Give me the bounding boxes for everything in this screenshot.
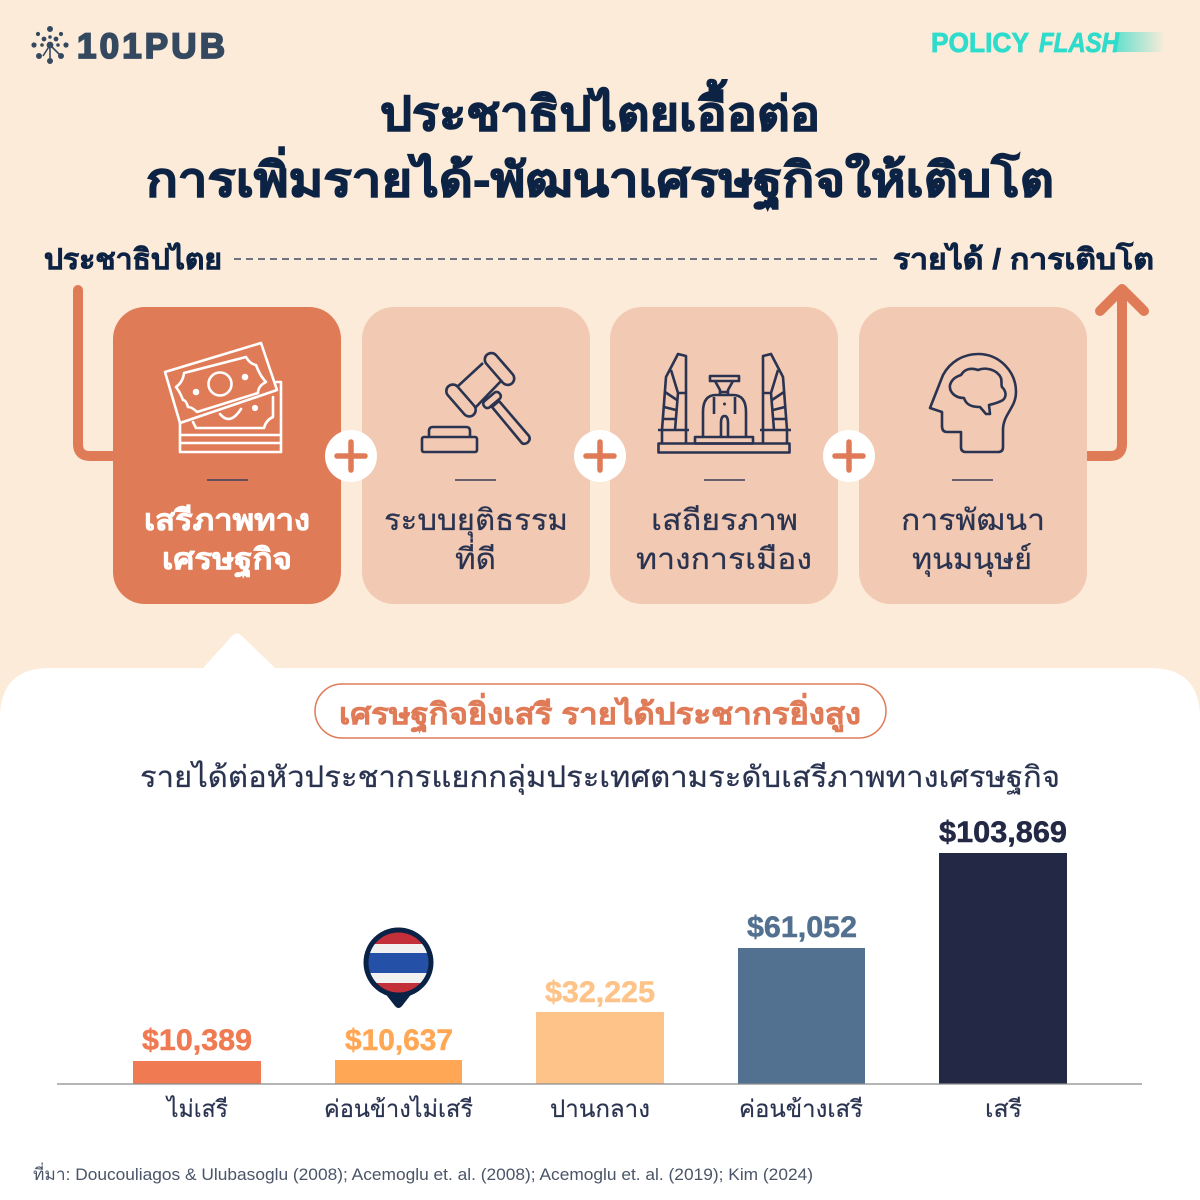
arrow: factors up to income [1087,289,1144,456]
icon: plus 2 [574,430,626,482]
icon: democracy monument [658,354,791,452]
bar: moderate: ปานกลาง [550,1096,650,1123]
label: human capital: ทุนมนุษย์ [912,543,1032,577]
source note: ที่มา: Doucouliagos & Ulubasoglu (2008); Acemoglu et. al. (2008); Acemoglu et. al. (2019); Kim (2024) [33,1162,813,1184]
label: justice system: ที่ดี [455,538,496,576]
label: justice system: ระบบยุติธรรม [384,504,568,538]
bar: not free: $10,389 [142,1024,252,1057]
icon: Thailand flag pin [364,928,434,1008]
panel: white chart section [0,634,1200,1200]
bar: free: $103,869 [939,816,1067,849]
label: economic freedom: เศรษฐกิจ [162,543,292,579]
title: ประชาธิปไตยเอื้อต่อ [380,79,820,140]
icon: banknotes [165,343,281,452]
label: justice system [384,504,568,576]
label: political stability: ทางการเมือง [636,543,812,576]
label: political stability: เสถียรภาพ [651,504,798,537]
arrow: democracy into factors [78,290,116,456]
bar: mostly free [738,911,865,1123]
bar: moderate: $32,225 [545,976,655,1009]
panel: economic freedom [113,307,341,604]
bar chart [57,816,1142,1123]
label: human capital: การพัฒนา [901,504,1045,537]
logo: 101PUB: 101PUB [77,27,225,66]
icon: head with brain [930,354,1016,452]
bar: moderate [536,976,664,1123]
bar: free [939,816,1067,1123]
logo: Policy Flash: FLASH [1039,27,1120,58]
bar: free: เสรี [985,1096,1022,1123]
bar: mostly free: $61,052 [747,911,857,944]
title [146,79,1054,211]
icon: plus 3 [823,430,875,482]
bar: not free: ไม่เสรี [165,1095,228,1123]
logo: Policy Flash [931,27,1165,58]
logo: Policy Flash: POLICY [931,27,1029,58]
panel: political stability [610,307,838,604]
label: human capital [901,504,1045,577]
label: economic freedom [144,504,310,579]
panel: justice system [362,307,590,604]
icon: plus 1 [325,430,377,482]
bar: mostly not free: ค่อนข้างไม่เสรี [324,1095,473,1123]
chart subtitle: รายได้ต่อหัวประชากรแยกกลุ่มประเทศตามระดับเสรีภาพทางเศรษฐกิจ [140,760,1060,795]
bar: mostly free: ค่อนข้างเสรี [739,1096,863,1123]
heading: income and growth: รายได้ / การเติบโต [893,241,1154,276]
title: การเพิ่มรายได้-พัฒนาเศรษฐกิจให้เติบโต [146,146,1054,211]
icon: gavel [422,350,530,452]
label: political stability [636,504,812,576]
bar: mostly not free [324,1024,473,1123]
bar: not free [133,1024,261,1123]
callout: freer economy, higher income: เศรษฐกิจยิ่งเสรี รายได้ประชากรยิ่งสูง [339,693,861,734]
heading: democracy: ประชาธิปไตย [44,242,222,276]
callout: freer economy, higher income [315,684,886,738]
bar: mostly not free: $10,637 [345,1024,453,1057]
panel: human capital [859,307,1087,604]
label: economic freedom: เสรีภาพทาง [144,504,310,537]
